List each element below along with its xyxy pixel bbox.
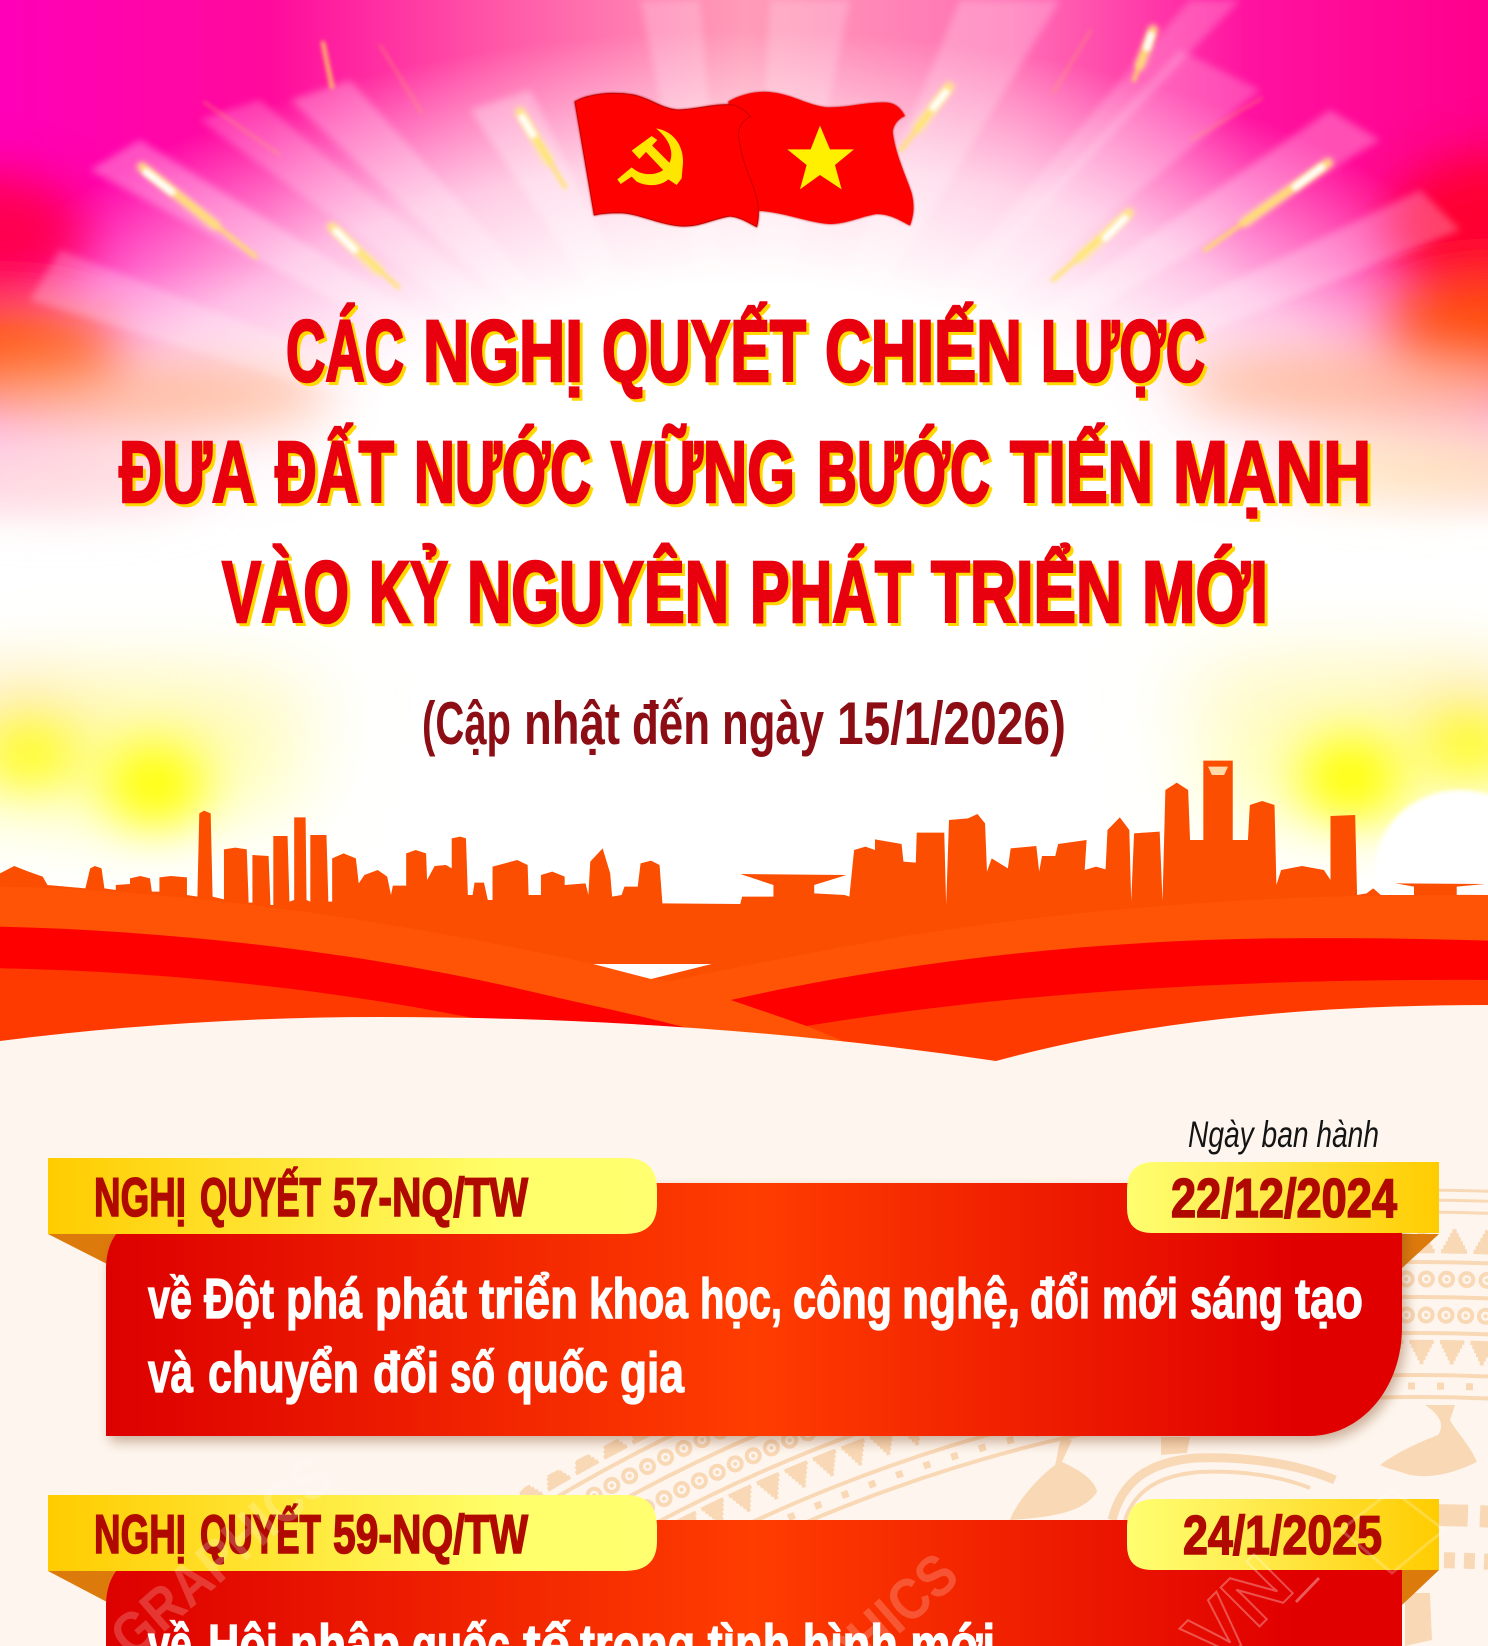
description: phát [375, 1267, 467, 1331]
subtitle: nhật [524, 690, 620, 757]
description [148, 1267, 1363, 1405]
subtitle: đến [632, 690, 710, 757]
description: chuyển [208, 1341, 359, 1405]
title: TIẾN [1010, 424, 1153, 521]
red body [106, 1183, 1402, 1436]
title: TRIỂN [931, 544, 1122, 641]
title: PHÁT [750, 544, 911, 641]
title: VÀO [222, 544, 349, 641]
right ribbon [645, 895, 1488, 1023]
resolution name: QUYẾT [200, 1166, 321, 1228]
description: công [793, 1267, 892, 1331]
description: đổi [373, 1341, 439, 1405]
red body [106, 1520, 1402, 1646]
description: Đột [204, 1267, 274, 1331]
white gap [593, 964, 712, 979]
description: quốc [507, 1341, 608, 1405]
description: tạo [1295, 1267, 1363, 1331]
cream body background [0, 1005, 1488, 1646]
title: LƯỢC [1041, 303, 1205, 400]
panel: resolution 57 [48, 1158, 1439, 1436]
subtitle: ngày [722, 690, 824, 757]
subtitle: (Cập [422, 690, 511, 757]
title: ĐƯA [119, 424, 255, 521]
description [148, 1620, 992, 1646]
flag: Vietnam star [728, 92, 913, 226]
resolution name: 59-NQ/TW [333, 1503, 528, 1565]
left lower band [0, 968, 683, 1047]
title: MẠNH [1173, 424, 1371, 521]
yellow title tab [48, 1158, 657, 1234]
title: ĐẤT [275, 424, 394, 521]
description: mới [1102, 1267, 1178, 1331]
light sparks [142, 30, 1328, 287]
description: học, [700, 1267, 782, 1331]
header label: issue date: Ngày ban hành [1188, 1114, 1379, 1155]
city skyline [0, 761, 1488, 1073]
description: và [148, 1341, 193, 1405]
fold triangles [48, 1234, 1439, 1268]
title: QUYẾT [602, 303, 806, 400]
subtitle: 15/1/2026) [837, 690, 1066, 757]
title: NGUYÊN [467, 543, 729, 641]
bronze drum pattern [519, 1188, 1488, 1646]
yellow date tab [1127, 1162, 1439, 1233]
resolution name: 57-NQ/TW [333, 1166, 528, 1228]
title: BƯỚC [817, 424, 990, 521]
description: số [450, 1341, 495, 1405]
description: khoa [589, 1267, 689, 1331]
title: NƯỚC [414, 424, 591, 521]
resolution name: QUYẾT [200, 1503, 321, 1565]
title: KỶ [369, 543, 448, 641]
watermarks [114, 1495, 1441, 1646]
title: NGHỊ [423, 303, 583, 400]
description: phá [286, 1267, 362, 1331]
description: nghệ, [902, 1267, 1020, 1331]
title: VỮNG [611, 424, 795, 521]
description: đổi [1030, 1267, 1090, 1331]
panel: resolution 59 [48, 1495, 1439, 1646]
title: CHIẾN [825, 303, 1022, 400]
flag: Party hammer and sickle [575, 93, 758, 227]
left ribbon [0, 887, 854, 1047]
left red band [0, 927, 688, 1028]
yellow date tab [1127, 1499, 1439, 1570]
skyline and ribbons [0, 761, 1488, 1073]
description: triển [479, 1267, 578, 1331]
right red band [731, 938, 1488, 1026]
yellow title tab [48, 1495, 657, 1571]
yellow and white glows behind skyline [0, 669, 1488, 955]
description: sáng [1190, 1267, 1283, 1331]
right lower band [807, 980, 1488, 1062]
description: gia [620, 1341, 685, 1405]
description: về [148, 1267, 192, 1331]
fold triangles [48, 1570, 1439, 1605]
title: CÁC [286, 303, 404, 400]
title: MỚI [1142, 544, 1268, 641]
subtitle [422, 690, 1066, 757]
resolution name: NGHỊ [94, 1166, 186, 1228]
resolution name [94, 1166, 528, 1228]
flags [575, 92, 913, 227]
date: 24/1/2025 [1183, 1504, 1382, 1566]
resolution name [94, 1503, 528, 1565]
header burst background [0, 0, 1488, 1000]
resolution name: NGHỊ [94, 1503, 186, 1565]
date: 22/12/2024 [1171, 1167, 1397, 1229]
title [119, 303, 1371, 641]
